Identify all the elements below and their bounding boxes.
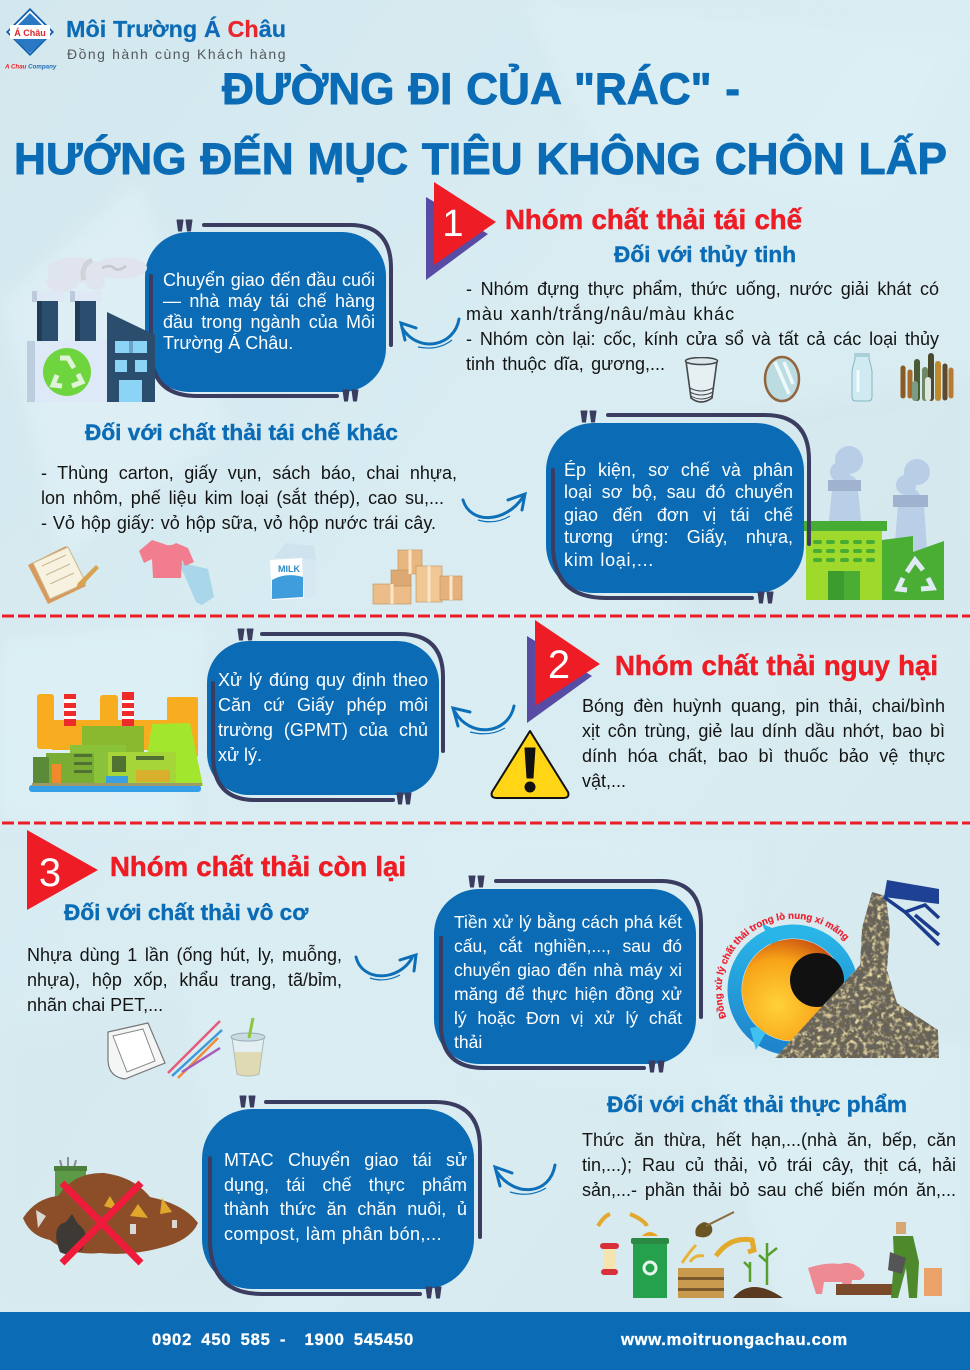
icon: food waste cycle to compost and feed xyxy=(594,1211,946,1301)
icon: paper notebooks xyxy=(28,546,99,604)
text block: other recyclables: lon nhôm, phế liệu kim loại (sắt thép), cao su,... xyxy=(41,488,444,508)
panel: transfer to recycling plant xyxy=(145,220,393,402)
subheading: food waste: Đối với chất thải thực phẩm xyxy=(607,1092,907,1117)
bubble text: thành thức ăn chăn nuôi, ủ xyxy=(224,1199,467,1219)
bubble text: đầu trong ngành của Môi xyxy=(163,312,375,332)
bubble text: loại sơ bộ, sau đó chuyển xyxy=(564,482,793,502)
bubble text: cấu, cắt nghiền,..., sau đó xyxy=(454,936,682,956)
bubble text: Trường Á Châu. xyxy=(163,333,293,353)
bubble text: dụng, tái chế thực phẩm xyxy=(224,1175,467,1195)
bubble text xyxy=(163,270,375,353)
title line 2: HƯỚNG ĐẾN MỤC TIÊU KHÔNG CHÔN LẤP xyxy=(14,135,947,184)
bubble text: giao đến đơn vị tái chế xyxy=(564,505,793,525)
heading: recyclable group: Nhóm chất thải tái chế xyxy=(505,204,802,235)
bubble xyxy=(202,1109,474,1289)
section 2 marker triangle xyxy=(527,620,600,723)
text block: food waste: Thức ăn thừa, hết hạn,...(nhà ăn, bếp, căn xyxy=(582,1130,956,1150)
text block: other recyclables: - Vỏ hộp giấy: vỏ hộp sữa, vỏ hộp nước trái cây. xyxy=(41,513,436,533)
text block: inorganic: nhựa), hộp xốp, khẩu trang, tã/bỉm, xyxy=(27,970,342,990)
bubble text: Chuyển giao đến đầu cuối xyxy=(163,270,375,290)
text block: glass: tinh thuộc dĩa, gương,... xyxy=(466,354,665,374)
icon: cement kiln co-processing: Đồng xử lý chất thải trong lò nung xi măng xyxy=(714,912,848,1019)
footer bar xyxy=(0,1312,970,1370)
bubble text: compost, làm phân bón,... xyxy=(224,1224,442,1244)
bubble text xyxy=(454,910,682,1054)
bubble text: tương ứng: Giấy, nhựa, xyxy=(564,527,793,547)
bubble text: Ép kiện, sơ chế và phân xyxy=(564,460,793,480)
bubble text: thải xyxy=(454,1032,482,1052)
phone numbers: 0902 450 585 - 1900 545450 xyxy=(152,1330,414,1349)
text block: hazardous xyxy=(582,696,945,790)
bubble text: lý hoặc Đơn vị xử lý chất xyxy=(454,1008,682,1028)
bubble text xyxy=(218,670,428,765)
logo name: Môi Trường Á Châu xyxy=(66,16,286,42)
bubble text xyxy=(564,460,793,570)
icon: logo diamond: A Chau Company xyxy=(4,64,57,70)
arrow: inorganic to bubble 4 xyxy=(354,952,418,980)
text block: inorganic: nhãn chai PET,... xyxy=(27,995,163,1015)
heading: hazardous group: Nhóm chất thải nguy hại xyxy=(615,650,938,681)
icon: logo diamond xyxy=(4,8,57,70)
divider: section 2 to 3 xyxy=(2,822,970,824)
bubble text: Xử lý đúng quy định theo xyxy=(218,670,428,690)
bubble xyxy=(434,889,696,1064)
text block: food waste xyxy=(582,1128,956,1202)
bubble text xyxy=(224,1148,467,1247)
bubble xyxy=(546,423,804,593)
text block: glass: - Nhóm đựng thực phẩm, thức uống, nước giải khát có xyxy=(466,278,939,298)
bubble frame and quote marks xyxy=(434,874,706,1076)
text block: other recyclables xyxy=(41,463,457,533)
section 1 marker triangle xyxy=(426,182,496,280)
icon: factory with recycling sign xyxy=(27,257,155,402)
arrow: food waste to bubble 5 xyxy=(493,1162,559,1200)
bubble xyxy=(207,641,439,795)
divider: section 1 to 2 xyxy=(2,614,970,618)
bubble text: măng để thực hiện đồng xử xyxy=(454,984,682,1004)
bubble frame and quote marks xyxy=(211,628,445,804)
text block: glass xyxy=(466,278,939,374)
bubble xyxy=(145,232,386,392)
section 2 marker triangle: 2 xyxy=(548,643,570,687)
subheading: glass: Đối với thủy tinh xyxy=(614,242,796,267)
icon: milk carton: MILK xyxy=(278,564,300,574)
section 3 marker triangle xyxy=(27,830,98,910)
icon: cardboard boxes xyxy=(372,550,462,604)
panel: baling and pre-sorting xyxy=(546,410,932,604)
title line 1: ĐƯỜNG ĐI CỦA "RÁC" - xyxy=(222,65,740,114)
text block: inorganic xyxy=(27,944,342,1015)
bubble text: Tiền xử lý bằng cách phá kết xyxy=(454,912,682,932)
text block: food waste: tin,...); Rau củ thải, vỏ trái cây, thịt cá, hải xyxy=(582,1154,956,1174)
text block: glass: màu xanh/trắng/nâu/màu khác xyxy=(466,304,735,324)
text block: glass: - Nhóm còn lại: cốc, kính cửa sổ và tất cả các loại thủy xyxy=(466,328,939,348)
icon: green recycling factory xyxy=(804,446,944,600)
arrow: other recyclables to bubble 2 xyxy=(462,492,527,522)
panel: reuse and compost xyxy=(202,1094,484,1302)
panel: pre-treatment and cement kiln xyxy=(434,876,703,1072)
icon: trash pile crossed out xyxy=(20,1155,202,1267)
bubble frame and quote marks xyxy=(149,220,393,402)
subheading: inorganic: Đối với chất thải vô cơ xyxy=(64,900,308,925)
icon: drinking glass xyxy=(684,357,718,403)
icon: power plant xyxy=(29,692,203,792)
bubble text: kim loại,... xyxy=(564,550,654,570)
title xyxy=(14,64,947,184)
icon: clothes xyxy=(139,540,214,605)
icon: cement kiln co-processing xyxy=(705,878,942,1062)
icon: mirror xyxy=(764,356,800,402)
text block: food waste: sản,...- phần thải bỏ sau chế biến món ăn,... xyxy=(582,1180,956,1200)
icon: warning sign xyxy=(490,730,570,799)
text block: inorganic: Nhựa dùng 1 lần (ống hút, ly, muỗng, xyxy=(27,945,342,965)
icon: assorted glass bottles xyxy=(900,353,954,401)
subheading: other recyclables: Đối với chất thải tái chế khác xyxy=(85,420,398,445)
logo slogan: Đồng hành cùng Khách hàng xyxy=(67,46,287,62)
heading: residual group: Nhóm chất thải còn lại xyxy=(110,851,406,882)
arrow: to bubble 1 xyxy=(398,318,460,349)
panel: treat per environmental permit xyxy=(207,628,445,804)
bubble text: MTAC Chuyển giao tái sử xyxy=(224,1150,467,1170)
text block: hazardous: Bóng đèn huỳnh quang, pin thải, chai/bình xyxy=(582,696,945,716)
text block: hazardous: vật,... xyxy=(582,770,626,790)
arrow: to bubble 3 xyxy=(450,704,516,734)
icon: milk carton xyxy=(270,544,316,600)
website: www.moitruongachau.com xyxy=(621,1330,848,1349)
bubble text: — nhà máy tái chế hàng xyxy=(163,291,375,311)
bubble text: Căn cứ Giấy phép môi xyxy=(218,695,428,715)
bubble text: chuyển giao đến nhà máy xi xyxy=(454,960,682,980)
bubble frame and quote marks xyxy=(202,1094,484,1302)
text block: hazardous: xịt côn trùng, giẻ lau dính dầu nhớt, bao bì xyxy=(582,720,945,740)
bubble frame and quote marks xyxy=(551,410,811,604)
section 1 marker triangle: 1 xyxy=(442,203,464,245)
text block: hazardous: dính hóa chất, bao bì thuốc bảo vệ thực xyxy=(582,746,945,766)
section 3 marker triangle: 3 xyxy=(39,851,61,895)
icon: foam box, straws and plastic cup xyxy=(107,1018,266,1080)
text block: other recyclables: - Thùng carton, giấy vụn, sách báo, chai nhựa, xyxy=(41,463,457,483)
icon: logo diamond: Á Châu xyxy=(14,28,46,38)
icon: milk bottle xyxy=(852,353,872,402)
logo xyxy=(4,8,287,70)
bubble text: trường (GPMT) của chủ xyxy=(218,720,428,740)
bubble text: xử lý. xyxy=(218,745,262,765)
